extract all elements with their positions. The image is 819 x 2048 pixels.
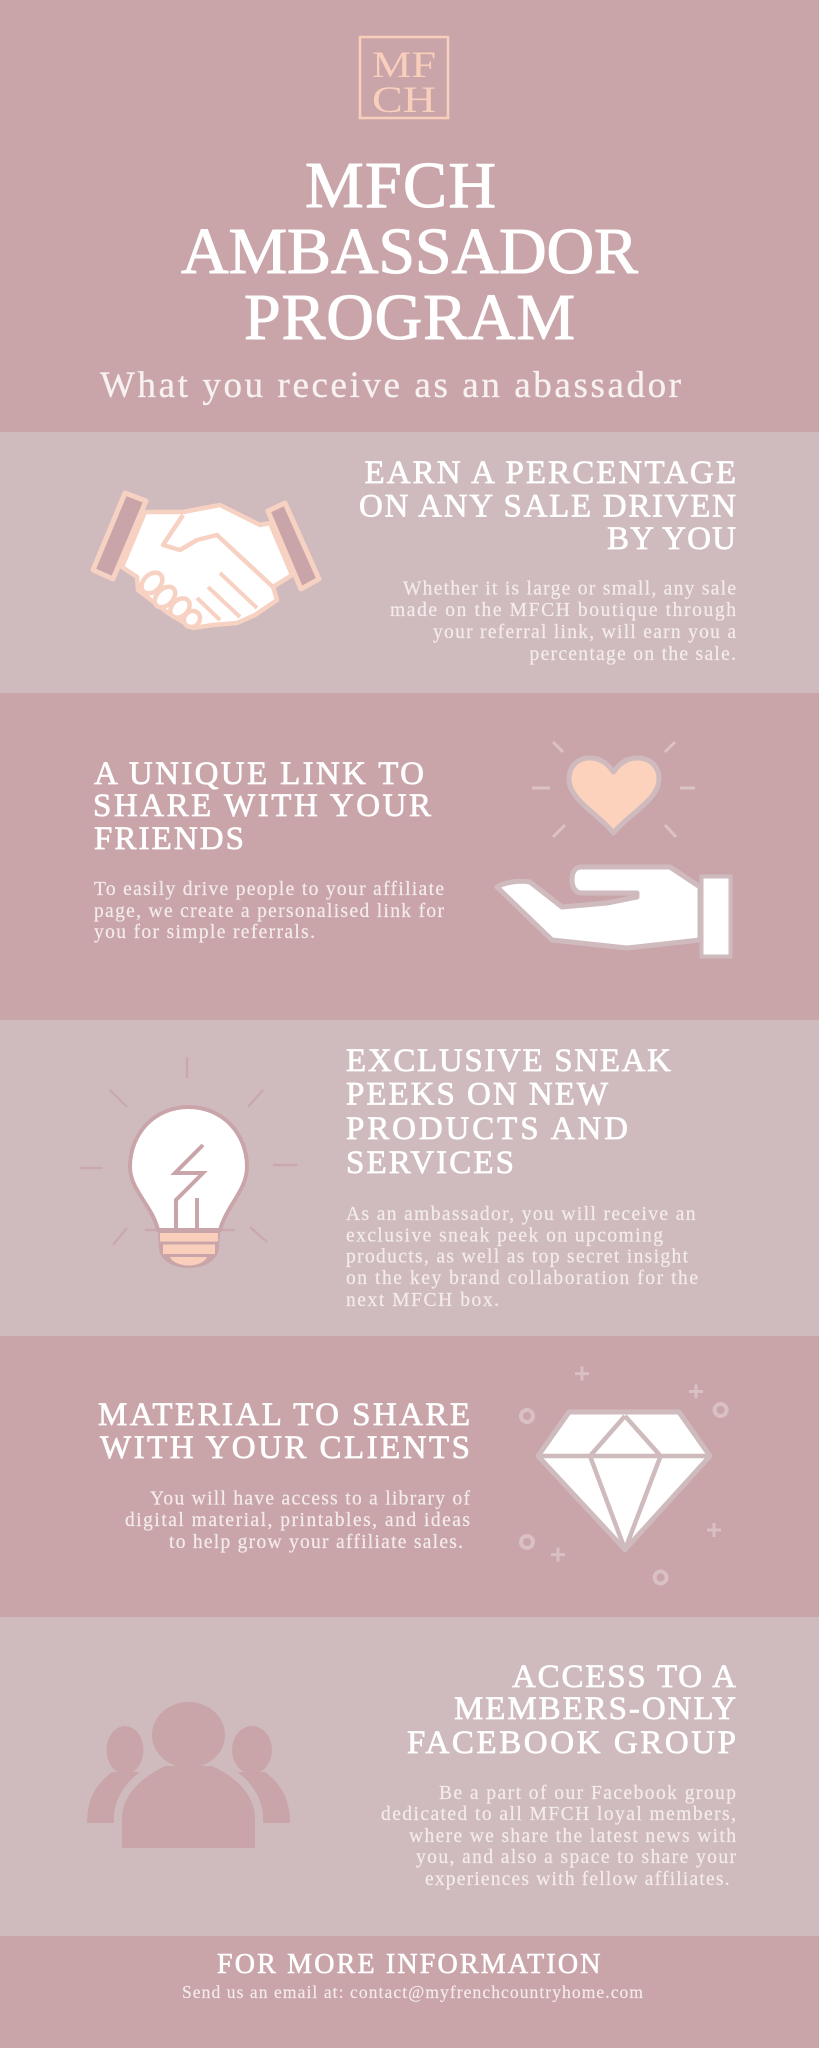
footer contact line: Send us an email at: contact@myfrenchcountryhome.com	[182, 1982, 643, 2002]
body text: Be a part of our Facebook group	[439, 1783, 736, 1804]
heading: SERVICES	[346, 1145, 514, 1181]
logo: MFCH monogram: MF	[372, 45, 436, 86]
heading: FACEBOOK GROUP	[407, 1725, 736, 1761]
panel: earn a percentage	[0, 432, 819, 693]
body text	[381, 1783, 736, 1890]
body text: next MFCH box.	[346, 1290, 499, 1311]
heading	[93, 756, 431, 857]
panel: material to share	[0, 1336, 819, 1617]
title: PROGRAM	[244, 281, 575, 354]
body text	[125, 1488, 470, 1553]
body text: Whether it is large or small, any sale	[403, 578, 736, 600]
panel: facebook group	[0, 1617, 819, 1936]
icon: handshake	[93, 493, 319, 630]
body text: experiences with fellow affiliates.	[425, 1869, 730, 1890]
heading: EXCLUSIVE SNEAK	[346, 1043, 671, 1079]
body text: exclusive sneak peek on upcoming	[346, 1226, 663, 1246]
heading: MEMBERS-ONLY	[454, 1691, 736, 1727]
heading: ON ANY SALE DRIVEN	[359, 488, 736, 524]
icon: light bulb	[80, 1057, 297, 1268]
logo: MFCH monogram: CH	[372, 80, 436, 121]
icon: group of people	[87, 1702, 290, 1848]
body text: dedicated to all MFCH loyal members,	[381, 1804, 736, 1825]
heading: EARN A PERCENTAGE	[364, 455, 736, 491]
heading: PRODUCTS AND	[346, 1111, 628, 1147]
heading	[346, 1043, 671, 1181]
heading: SHARE WITH YOUR	[93, 788, 431, 824]
heading: MATERIAL TO SHARE	[98, 1397, 470, 1433]
icon: diamond	[521, 1367, 727, 1584]
body text: you for simple referrals.	[94, 922, 315, 943]
body text: digital material, printables, and ideas	[125, 1510, 470, 1531]
heading: ACCESS TO A	[512, 1659, 736, 1695]
body text: to help grow your affiliate sales.	[169, 1532, 463, 1553]
body text: percentage on the sale.	[530, 644, 736, 665]
body text: where we share the latest news with	[409, 1826, 736, 1847]
body text	[390, 578, 736, 665]
body text: As an ambassador, you will receive an	[346, 1204, 696, 1225]
heading: A UNIQUE LINK TO	[94, 756, 424, 792]
subtitle: What you receive as an abassador	[100, 365, 681, 406]
body text	[94, 879, 444, 943]
panel: unique link	[0, 693, 819, 1020]
title: AMBASSADOR	[181, 215, 638, 288]
panel: sneak peeks	[0, 1020, 819, 1336]
body text: page, we create a personalised link for	[94, 901, 444, 922]
body text: To easily drive people to your affiliate	[94, 879, 444, 900]
title: MFCH	[305, 149, 496, 222]
heading: FRIENDS	[94, 821, 244, 857]
logo: MFCH monogram	[360, 37, 448, 121]
heading: BY YOU	[607, 521, 736, 557]
body text: you, and also a space to share your	[416, 1847, 736, 1868]
body text: products, as well as top secret insight	[346, 1247, 689, 1268]
body text	[346, 1204, 698, 1311]
icon: heart in hand	[497, 742, 730, 956]
panel: footer	[0, 1936, 819, 2048]
body text: You will have access to a library of	[150, 1488, 470, 1510]
heading	[359, 455, 736, 557]
title	[181, 149, 638, 354]
body text: your referral link, will earn you a	[433, 622, 736, 643]
heading	[98, 1397, 470, 1466]
body text: on the key brand collaboration for the	[346, 1268, 698, 1289]
heading: WITH YOUR CLIENTS	[100, 1430, 470, 1466]
body text: made on the MFCH boutique through	[390, 600, 736, 621]
footer heading: FOR MORE INFORMATION	[217, 1949, 600, 1980]
heading: PEEKS ON NEW	[346, 1076, 609, 1112]
panel: header	[0, 0, 819, 432]
heading	[407, 1659, 736, 1761]
